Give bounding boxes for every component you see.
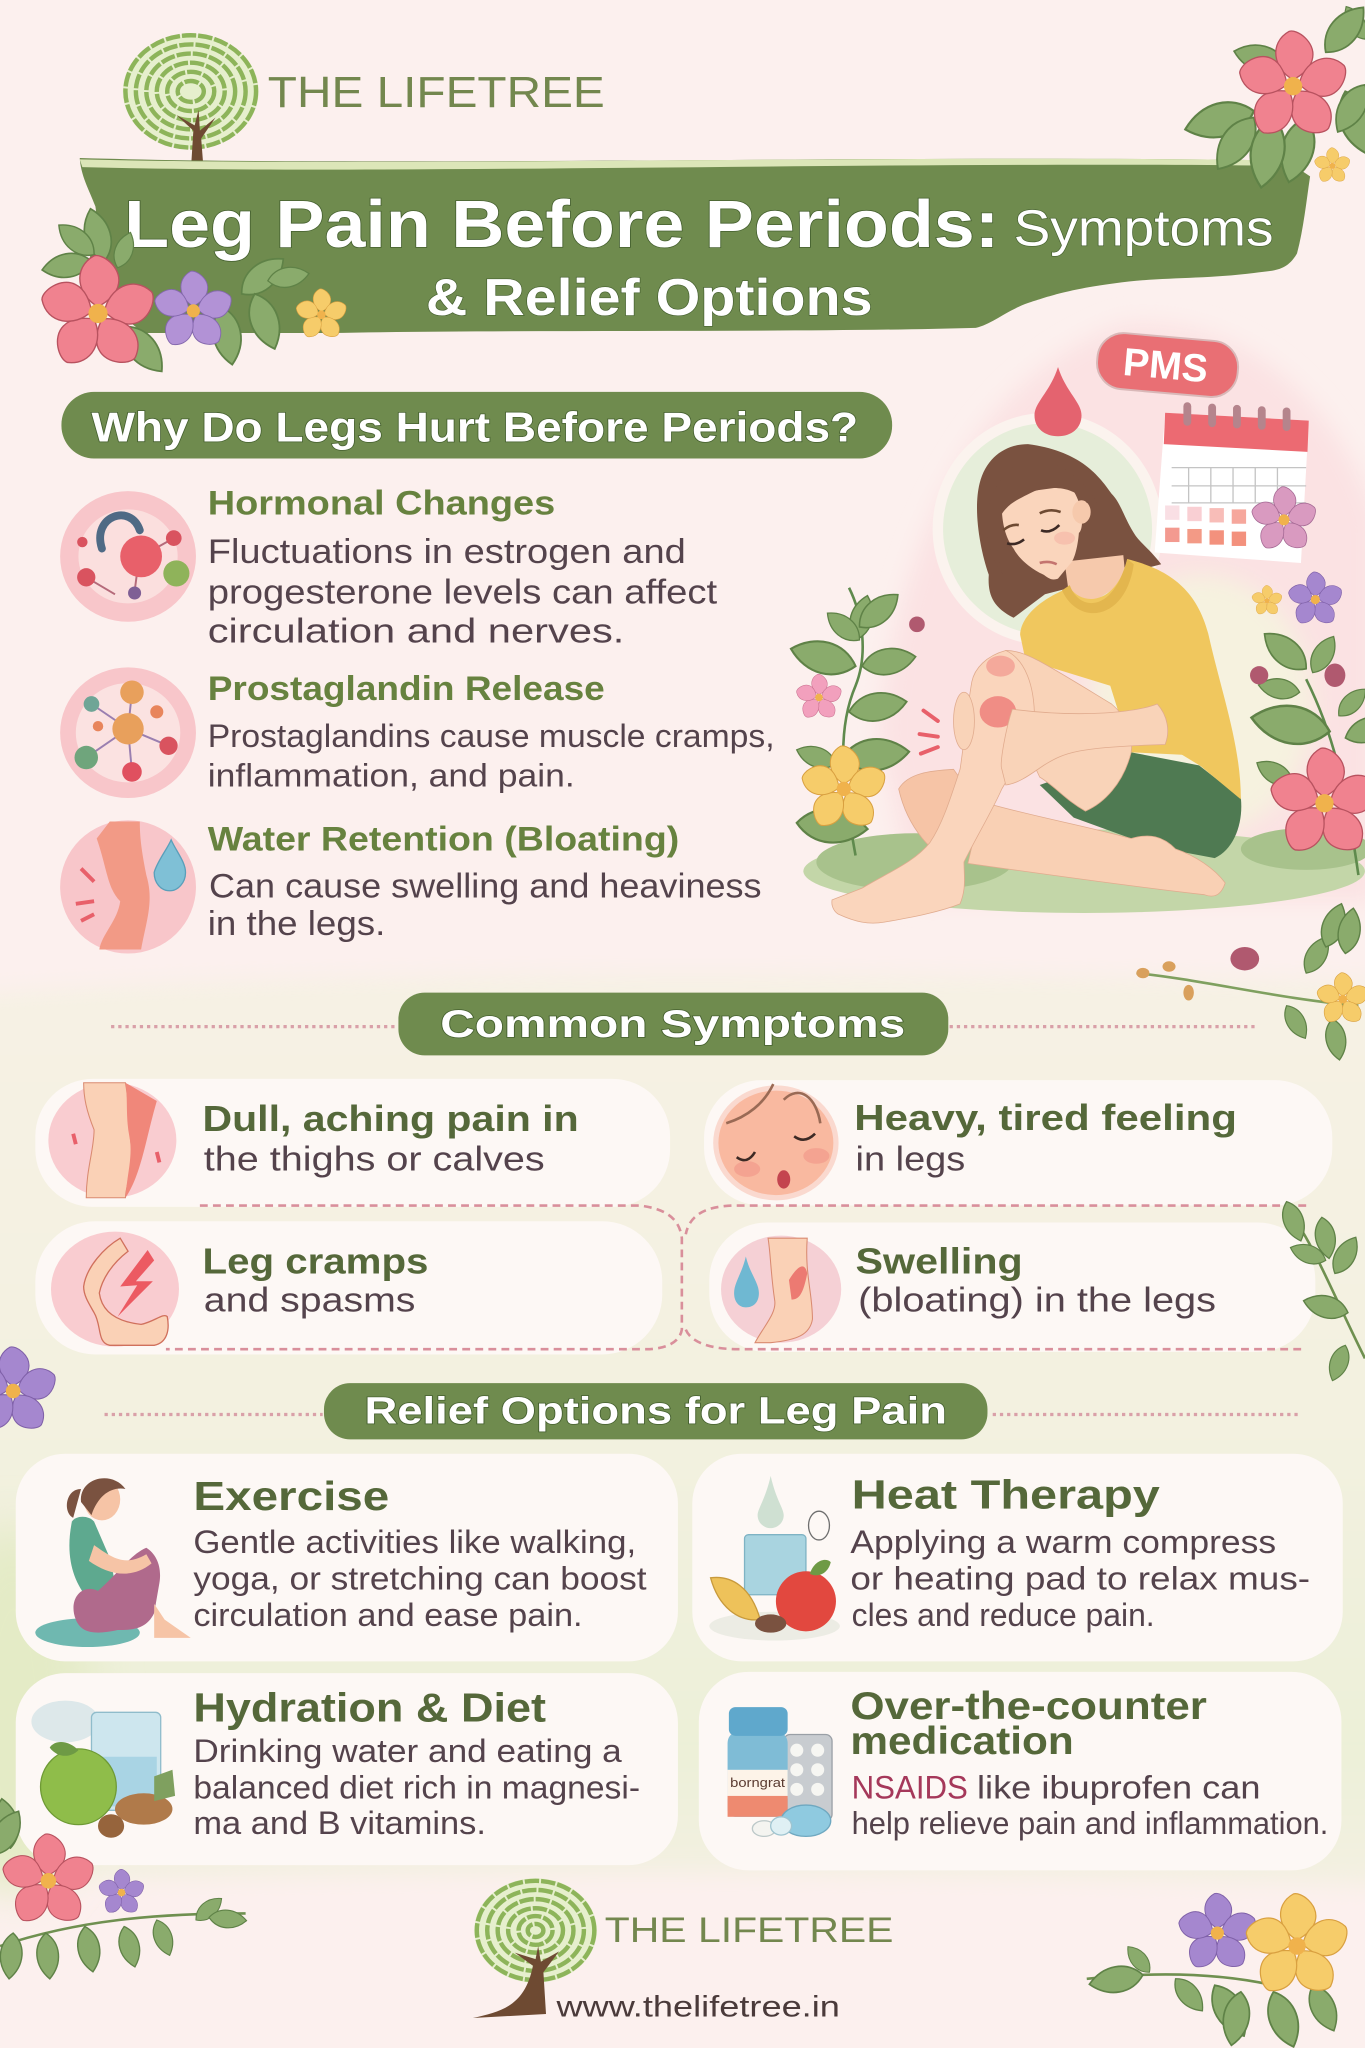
card text: Dull, aching pain in [202,1098,579,1139]
background: green tint left of relief cards [0,1528,91,1894]
section heading: common symptoms [111,993,1258,1055]
bottom logo: THE LIFETREE [605,1911,893,1950]
shorts [1040,752,1241,858]
flowers: top right corner [1181,0,1365,190]
text: hormonal changes: circulation and nerves. [208,613,624,651]
card text: the thighs or calves [204,1140,545,1178]
bottom logo [473,1878,893,2024]
card text [850,1472,1310,1633]
icon: medicine bottle and pills: borngrat [730,1775,785,1790]
title banner: Leg Pain Before Periods: [124,188,999,262]
card text [193,1473,647,1633]
bottom logo: www.thelifetree.in [555,1991,840,2024]
illustration backdrop [878,323,1365,901]
decorative branch: right edge [1277,1198,1365,1384]
pale wash behind figure [1091,575,1313,836]
card: dull aching pain [35,1079,670,1207]
woman figure [832,444,1241,923]
card: exercise [16,1454,678,1661]
card text: Applying a warm compress [850,1523,1276,1560]
title banner: & Relief Options [426,269,873,327]
icon: leg with pain marks [48,1083,176,1198]
top logo [123,34,605,174]
icon: woman stretching [35,1478,191,1647]
icon: water glass and apple [31,1701,175,1838]
icon: swollen ankle [721,1236,841,1343]
card text: help relieve pain and inflammation. [852,1806,1328,1841]
card text: Hydration & Diet [193,1684,546,1730]
icon: tired face [716,1084,836,1198]
card text: Over-the-counter [850,1685,1207,1728]
card: leg cramps [35,1221,662,1354]
section heading: why: Why Do Legs Hurt Before Periods? [91,403,858,450]
fingers behind shin [954,692,974,750]
left plant [787,586,925,856]
title banner [80,158,1310,333]
text: hormonal changes: Hormonal Changes [208,485,555,523]
card text: Swelling [856,1240,1023,1281]
pain spots [980,656,1016,728]
card text: yoga, or stretching can boost [193,1560,647,1597]
flowers: bottom left [0,1797,247,1980]
shin and foot [832,650,1034,923]
text: water retention: Can cause swelling and heaviness [209,867,762,905]
card text: NSAIDS [852,1769,968,1806]
card text: cles and reduce pain. [852,1596,1155,1633]
card text [202,1240,428,1319]
card text: balanced diet rich in magnesi- [193,1769,640,1806]
face [1002,486,1091,579]
card: over-the-counter medication [699,1672,1341,1870]
text: prostaglandin release: Prostaglandins cause muscle cramps, [208,717,775,754]
text: hormonal changes: Fluctuations in estrogen and [208,533,686,571]
decorative flower: left edge [0,1347,60,1436]
blood drop [1034,367,1082,436]
top logo: THE LIFETREE [268,69,605,117]
section heading: common symptoms: Common Symptoms [440,1003,905,1046]
background: green symptoms and relief band [0,975,1365,1887]
text: hormonal changes [208,485,718,651]
card: hydration and diet [16,1673,678,1865]
card text: (bloating) in the legs [858,1281,1216,1319]
card text: Exercise [193,1473,389,1519]
hair [977,444,1161,618]
card text: Leg cramps [202,1240,428,1281]
decorative branch: right of symptoms heading [1136,900,1365,1062]
text: prostaglandin release: inflammation, and pain. [208,756,575,793]
text: prostaglandin release [208,670,775,793]
section heading: relief options: Relief Options for Leg Pain [364,1391,947,1433]
neck [1065,555,1126,603]
card text: like ibuprofen can [977,1769,1260,1806]
raised thigh [1006,650,1132,811]
text: water retention: Water Retention (Bloating) [208,820,679,858]
card text: and spasms [204,1281,415,1319]
text: prostaglandin release: Prostaglandin Release [208,670,605,708]
sweater collar [1062,559,1134,613]
back thigh [899,769,982,862]
dashed connectors between symptom cards [166,1206,1306,1349]
icon: glass with fruit [709,1476,840,1640]
card: heavy tired feeling [704,1080,1332,1206]
card text: in legs [856,1140,965,1178]
flowers: bottom right [1087,1893,1353,2048]
card text: medication [850,1720,1074,1763]
calendar [1155,402,1319,563]
lower lying leg [968,802,1225,896]
card text: Gentle activities like walking, [193,1523,636,1560]
icon: cramping leg [51,1232,179,1347]
card text: or heating pad to relax mus- [850,1560,1310,1597]
pain marks [920,711,938,754]
card: heat therapy [692,1454,1343,1661]
icon: medicine bottle and pills [728,1707,832,1836]
ground [803,828,1365,913]
sleeve [1143,666,1234,784]
card text [193,1684,640,1841]
card: swelling [709,1223,1315,1352]
flowers: banner left [37,205,349,380]
PMS badge [1095,331,1240,399]
icon: hormones [60,491,196,622]
card text: Heavy, tired feeling [854,1097,1237,1138]
icon: water retention leg [60,820,196,953]
halo behind head [938,418,1157,640]
card text [202,1098,579,1178]
PMS badge: PMS [1121,341,1210,391]
text: water retention: in the legs. [208,905,385,943]
section heading: why [61,392,892,458]
card text: Heat Therapy [852,1472,1160,1518]
icon: prostaglandin molecule [60,667,196,798]
text: water retention [208,820,762,943]
card text [850,1685,1328,1841]
card text: circulation and ease pain. [193,1596,583,1633]
card text: ma and B vitamins. [193,1804,486,1841]
hair fringe [986,460,1097,575]
illustration: woman with leg pain [787,323,1365,923]
card text [856,1240,1216,1319]
card text [854,1097,1237,1178]
arm and hand [1001,704,1168,785]
title banner: Symptoms [1014,200,1274,257]
right plant [1248,572,1365,875]
section heading: relief options [105,1383,1300,1439]
text: hormonal changes: progesterone levels can affect [208,573,718,611]
card text: Drinking water and eating a [193,1732,623,1769]
sweater [1020,559,1241,799]
